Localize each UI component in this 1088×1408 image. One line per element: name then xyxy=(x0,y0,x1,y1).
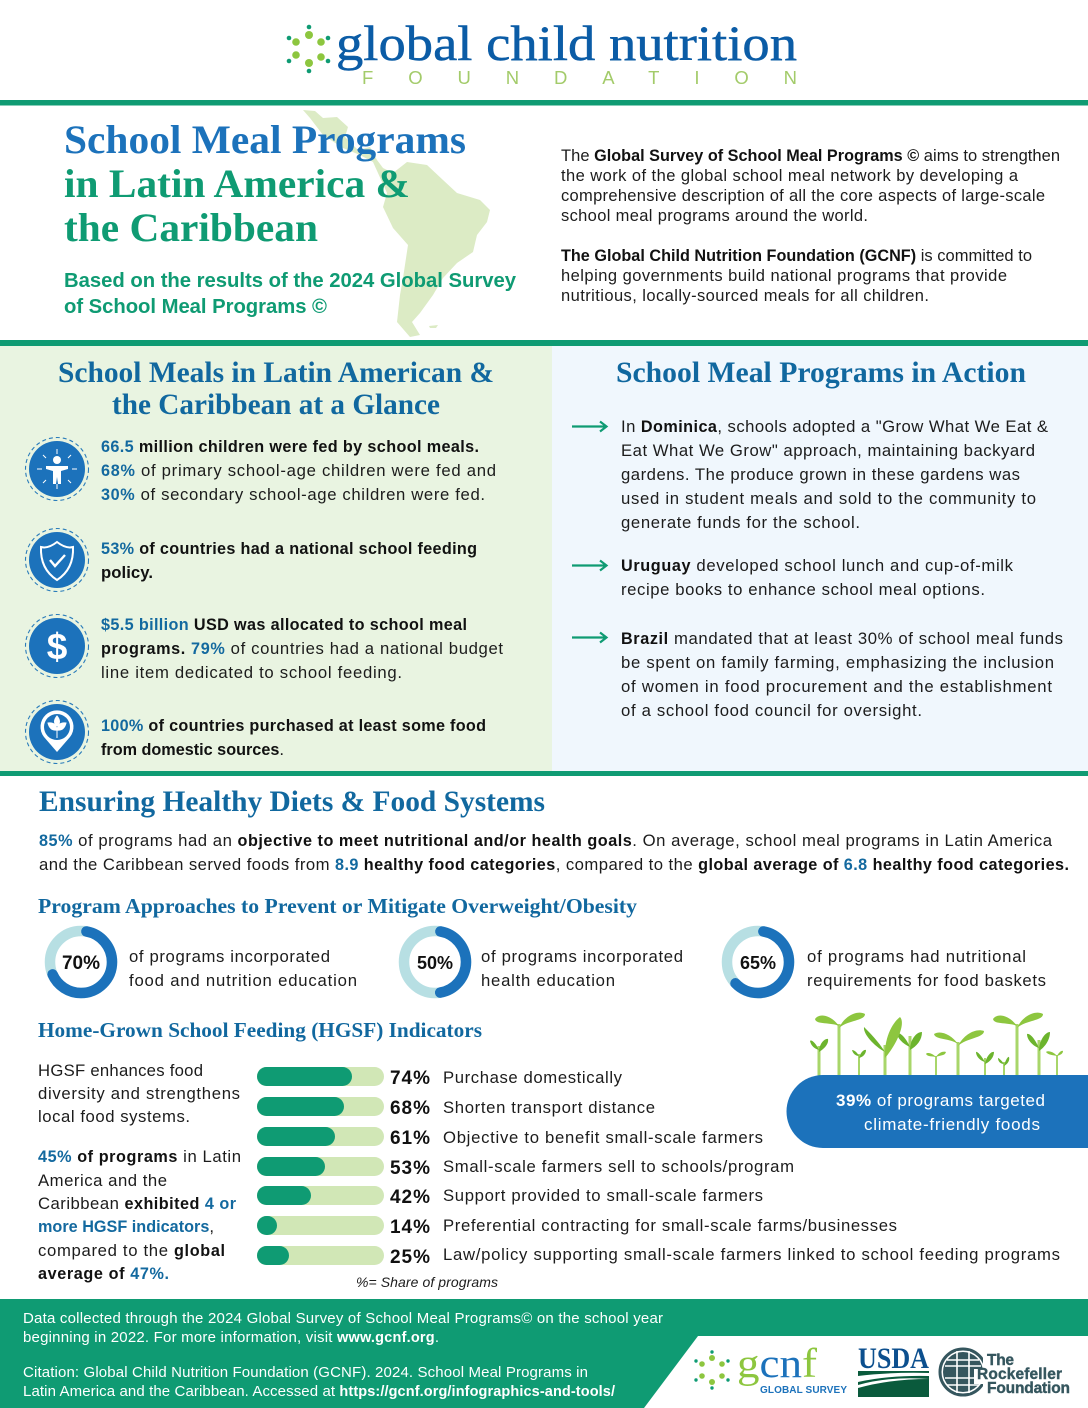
bar: shorten transport xyxy=(257,1097,655,1119)
callout: climate-friendly foods xyxy=(786,1075,1088,1148)
bar: shorten transport: Shorten transport distance xyxy=(443,1098,655,1117)
bar: law/policy: Law/policy supporting small-scale farmers linked to school feeding programs xyxy=(443,1245,1060,1264)
text: budget: programs. 79% of countries had a national budget xyxy=(101,639,503,658)
text: health education: of programs incorporated xyxy=(481,947,683,966)
arrow: Uruguay xyxy=(572,560,606,570)
subtitle xyxy=(64,270,517,318)
icon: shield xyxy=(26,528,88,592)
bar: preferential contracting: 14% xyxy=(390,1217,430,1238)
text: Uruguay xyxy=(621,556,1014,599)
heading: at a glance xyxy=(58,357,494,421)
bar: purchase domestically: Purchase domestically xyxy=(443,1068,623,1087)
text: healthy diets summary xyxy=(39,831,1069,874)
panel: at a glance xyxy=(0,346,552,771)
text: Dominica: gardens. The produce grown in these gardens was xyxy=(621,465,1020,484)
bar: objective: Objective to benefit small-scale farmers xyxy=(443,1128,763,1147)
bar: objective xyxy=(257,1127,763,1149)
note: share of programs: %= Share of programs xyxy=(356,1274,498,1290)
text: children fed: 68% of primary school-age children were fed and xyxy=(101,461,496,480)
text: children fed: 30% of secondary school-age children were fed. xyxy=(101,485,485,504)
logo: Global Child Nutrition Foundation: global child nutrition xyxy=(336,15,797,71)
bar: law/policy xyxy=(257,1245,1060,1268)
text: Dominica: generate funds for the school. xyxy=(621,513,860,532)
callout: climate-friendly foods: 39% of programs targeted xyxy=(836,1091,1045,1110)
header rule xyxy=(0,100,1088,106)
text: domestic sources xyxy=(101,717,486,759)
footer text xyxy=(23,1310,663,1400)
text: HGSF explanation: Caribbean exhibited 4 or xyxy=(38,1194,237,1213)
text: HGSF explanation: 45% of programs in Latin xyxy=(38,1147,241,1166)
footer logo panel xyxy=(644,1336,1088,1408)
text: HGSF explanation: local food systems. xyxy=(38,1107,190,1126)
logo: Rockefeller Foundation: Rockefeller xyxy=(977,1366,1062,1383)
text: Brazil: of women in food procurement and the establishment xyxy=(621,677,1052,696)
footer text: Data collected through the 2024 Global Survey of School Meal Programs© on the school year xyxy=(23,1310,663,1327)
bar: small-scale sell: Small-scale farmers sell to schools/program xyxy=(443,1157,794,1176)
text: HGSF explanation: more HGSF indicators, xyxy=(38,1217,214,1236)
title: School Meal Programs xyxy=(64,117,466,162)
logo: Global Child Nutrition Foundation xyxy=(287,15,797,88)
text: national policy: 53% of countries had a national school feeding xyxy=(101,540,477,558)
logo: Rockefeller Foundation xyxy=(940,1349,1070,1397)
donut: 65% xyxy=(727,931,789,993)
text: Brazil: Brazil mandated that at least 30% of school meal funds xyxy=(621,629,1063,648)
text: food and nutrition education xyxy=(129,947,357,990)
arrow: Dominica xyxy=(572,422,606,432)
donut: 65%: 65% xyxy=(740,953,776,973)
donut: 50% xyxy=(404,931,466,993)
logo: Rockefeller Foundation: Foundation xyxy=(987,1380,1070,1397)
text: children fed xyxy=(101,438,496,504)
text: food and nutrition education: food and nutrition education xyxy=(129,971,357,990)
text: budget xyxy=(101,616,503,682)
text: HGSF explanation: average of 47%. xyxy=(38,1265,169,1283)
bar: shorten transport: 68% xyxy=(390,1098,430,1119)
text: Brazil: be spent on family farming, emphasizing the inclusion xyxy=(621,653,1054,672)
text: Dominica: Eat What We Grow" approach, maintaining backyard xyxy=(621,441,1035,460)
subtitle: Based on the results of the 2024 Global Survey xyxy=(64,270,517,292)
map: Latin America silhouette xyxy=(303,110,490,337)
heading: at a glance: the Caribbean at a Glance xyxy=(112,389,440,421)
heading: HGSF: Home-Grown School Feeding (HGSF) Indicators xyxy=(38,1018,482,1042)
heading: healthy diets: Ensuring Healthy Diets & Food Systems xyxy=(39,786,545,818)
intro text block: school meal programs around the world. xyxy=(561,207,868,225)
text: HGSF explanation xyxy=(38,1061,241,1283)
subtitle: of School Meal Programs © xyxy=(64,296,327,318)
logo: GCNF Global Survey: GLOBAL SURVEY xyxy=(760,1385,847,1396)
text: food baskets: requirements for food baskets xyxy=(807,971,1046,990)
footer text: Citation: Global Child Nutrition Foundation (GCNF). 2024. School Meal Programs in xyxy=(23,1364,588,1381)
text: national policy xyxy=(101,540,477,582)
logo: GCNF Global Survey: gcnf xyxy=(737,1340,817,1386)
text: HGSF explanation: America and the xyxy=(38,1171,167,1190)
logo: USDA xyxy=(858,1342,929,1397)
footer band xyxy=(0,1299,1088,1408)
text: HGSF explanation: HGSF enhances food xyxy=(38,1061,203,1080)
icon: child xyxy=(26,438,88,500)
text: Brazil: of a school food council for oversight. xyxy=(621,701,922,720)
heading: overweight approaches: Program Approaches to Prevent or Mitigate Overweight/Obesity xyxy=(38,894,637,918)
intro text block: helping governments build national programs that provide xyxy=(561,267,1007,285)
bar: small-scale sell xyxy=(257,1157,794,1179)
bar: support xyxy=(257,1186,763,1208)
bar: objective: 61% xyxy=(390,1128,430,1149)
icon: dollar xyxy=(26,614,88,678)
donut: 70% xyxy=(50,931,112,993)
icon: plant pin xyxy=(26,700,88,764)
text: Uruguay: Uruguay developed school lunch and cup-of-milk xyxy=(621,556,1014,575)
bar: small-scale sell: 53% xyxy=(390,1158,430,1179)
footer text: beginning in 2022. For more information, visit www.gcnf.org. xyxy=(23,1329,439,1346)
intro text block: The Global Survey of School Meal Programs © aims to strengthen xyxy=(561,147,1060,165)
text: HGSF explanation: compared to the global xyxy=(38,1241,225,1260)
donut: 50%: 50% xyxy=(417,953,453,973)
footer text: Latin America and the Caribbean. Accessed at https://gcnf.org/infographics-and-tools/ xyxy=(23,1383,615,1400)
text: Brazil xyxy=(621,629,1063,720)
logo: USDA: USDA xyxy=(858,1342,929,1375)
text: domestic sources: 100% of countries purchased at least some food xyxy=(101,717,486,735)
text: national policy: policy. xyxy=(101,563,153,582)
intro text block xyxy=(561,147,1060,305)
text: children fed: 66.5 million children were fed by school meals. xyxy=(101,438,479,456)
heading: at a glance: School Meals in Latin American & xyxy=(58,357,494,389)
logo: Rockefeller Foundation: The xyxy=(987,1352,1014,1369)
text: healthy diets summary: 85% of programs had an objective to meet nutritional and/or health goals. On average, school meal programs in Latin America xyxy=(39,831,1053,850)
text: budget: line item dedicated to school feeding. xyxy=(101,663,402,682)
callout: climate-friendly foods: climate-friendly foods xyxy=(864,1115,1040,1134)
illustration: seedlings xyxy=(810,1013,1063,1076)
text: domestic sources: from domestic sources. xyxy=(101,740,284,759)
text: Uruguay: recipe books to enhance school meal options. xyxy=(621,580,985,599)
icon: dollar: $ xyxy=(47,626,68,667)
text: Dominica: In Dominica, schools adopted a "Grow What We Eat & xyxy=(621,417,1048,436)
text: healthy diets summary: and the Caribbean served foods from 8.9 healthy food categories, compared to the global average of 6.8 healthy food categories. xyxy=(39,855,1069,874)
bar: support: 42% xyxy=(390,1187,430,1208)
section rules xyxy=(0,340,1088,776)
bar chart: HGSF indicators xyxy=(257,1067,1060,1268)
donut: 70%: 70% xyxy=(62,953,100,974)
arrow: Brazil xyxy=(572,632,606,642)
intro text block: The Global Child Nutrition Foundation (GCNF) is committed to xyxy=(561,247,1032,265)
bar: preferential contracting: Preferential contracting for small-scale farms/businesses xyxy=(443,1216,897,1235)
logo: Global Child Nutrition Foundation: FOUNDATION xyxy=(362,67,797,88)
text: Dominica: used in student meals and sold to the community to xyxy=(621,489,1036,508)
intro text block: nutritious, locally-sourced meals for all children. xyxy=(561,287,929,305)
text: food baskets xyxy=(807,947,1046,990)
text: Dominica xyxy=(621,417,1048,532)
text: budget: $5.5 billion USD was allocated to school meal xyxy=(101,616,467,634)
bar: law/policy: 25% xyxy=(390,1247,430,1268)
title: in Latin America & xyxy=(64,161,410,206)
text: food baskets: of programs had nutritional xyxy=(807,947,1026,966)
title: the Caribbean xyxy=(64,205,318,250)
intro text block: the work of the global school meal network by developing a xyxy=(561,167,1019,185)
panel: programs in action xyxy=(552,346,1088,771)
logo: GCNF Global Survey xyxy=(694,1340,847,1396)
title xyxy=(64,117,466,250)
heading: in action: School Meal Programs in Action xyxy=(616,357,1026,389)
bar: purchase domestically: 74% xyxy=(390,1068,430,1089)
bar: support: Support provided to small-scale farmers xyxy=(443,1186,763,1205)
text: HGSF explanation: diversity and strengthens xyxy=(38,1084,240,1103)
bar: preferential contracting xyxy=(257,1216,897,1238)
intro text block: comprehensive description of all the core aspects of large-scale xyxy=(561,187,1045,205)
text: health education xyxy=(481,947,683,990)
text: food and nutrition education: of programs incorporated xyxy=(129,947,330,966)
text: health education: health education xyxy=(481,971,615,990)
bar: purchase domestically xyxy=(257,1067,623,1089)
